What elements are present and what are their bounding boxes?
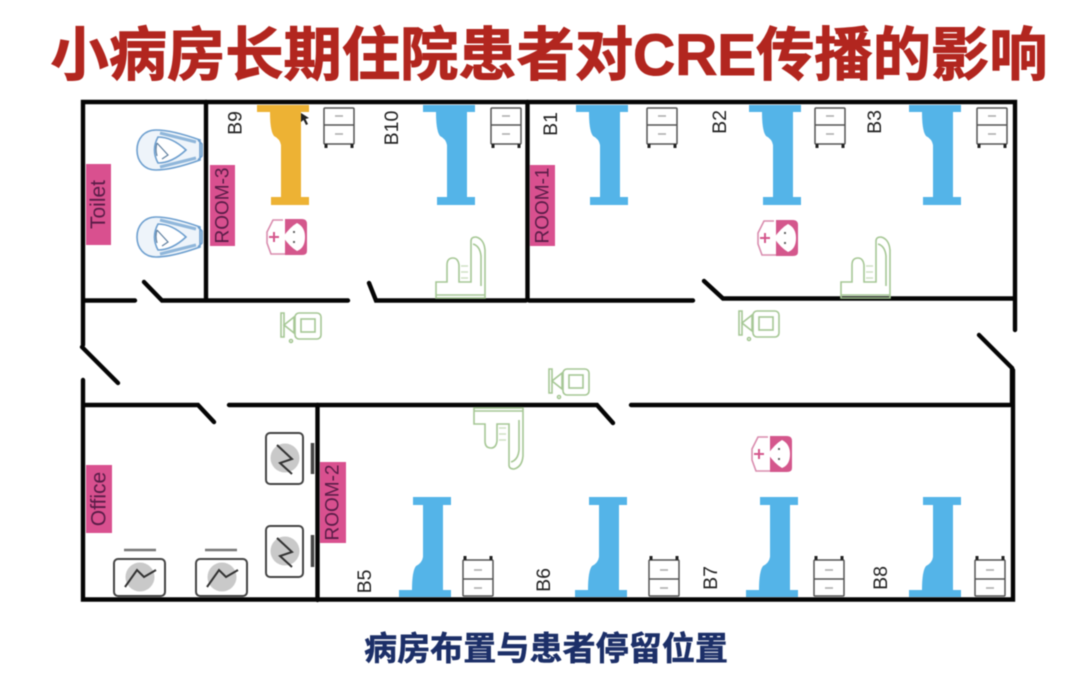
room label: ROOM-3: ROOM-3 bbox=[212, 168, 234, 244]
bed B7: B7 bbox=[700, 566, 722, 590]
caption: 病房布置与患者停留位置 bbox=[364, 630, 728, 667]
bedside cabinets bbox=[324, 108, 1007, 596]
bed B10: B10 bbox=[381, 111, 403, 145]
icon: mouse cursor bbox=[301, 113, 309, 125]
bed B10 bbox=[381, 105, 475, 205]
title: 小病房长期住院患者对CRE传播的影响 bbox=[50, 23, 1048, 88]
icon: toilets bbox=[137, 130, 202, 257]
room label: Office: Office bbox=[88, 472, 110, 526]
bed B5 bbox=[354, 497, 451, 597]
room label: Toilet bbox=[86, 164, 111, 245]
bed B9 occupied by long-stay patient: B9 bbox=[224, 111, 246, 135]
floor plan bbox=[82, 102, 1015, 600]
bed B8 bbox=[870, 497, 961, 597]
icon: nurses bbox=[267, 219, 798, 472]
walls bbox=[82, 102, 1015, 600]
bed B2 bbox=[709, 105, 801, 205]
bed B6: B6 bbox=[533, 568, 555, 592]
room label: Toilet: Toilet bbox=[87, 180, 110, 229]
bed B2: B2 bbox=[709, 110, 731, 134]
bed B8: B8 bbox=[870, 566, 892, 590]
bed B1: B1 bbox=[540, 112, 562, 136]
room label: ROOM-1: ROOM-1 bbox=[532, 168, 554, 244]
bed B5: B5 bbox=[354, 569, 376, 593]
bed B6 bbox=[533, 497, 627, 597]
icon: office equipment bbox=[114, 433, 312, 596]
bed B3: B3 bbox=[864, 110, 886, 134]
bed B3 bbox=[864, 105, 961, 205]
bed B9 occupied by long-stay patient bbox=[224, 105, 309, 205]
bed B1 bbox=[540, 105, 628, 205]
room label: ROOM-2: ROOM-2 bbox=[322, 464, 344, 540]
icon: corridor cameras bbox=[281, 311, 779, 398]
icon: sinks bbox=[436, 237, 890, 469]
bed B7 bbox=[700, 497, 798, 597]
